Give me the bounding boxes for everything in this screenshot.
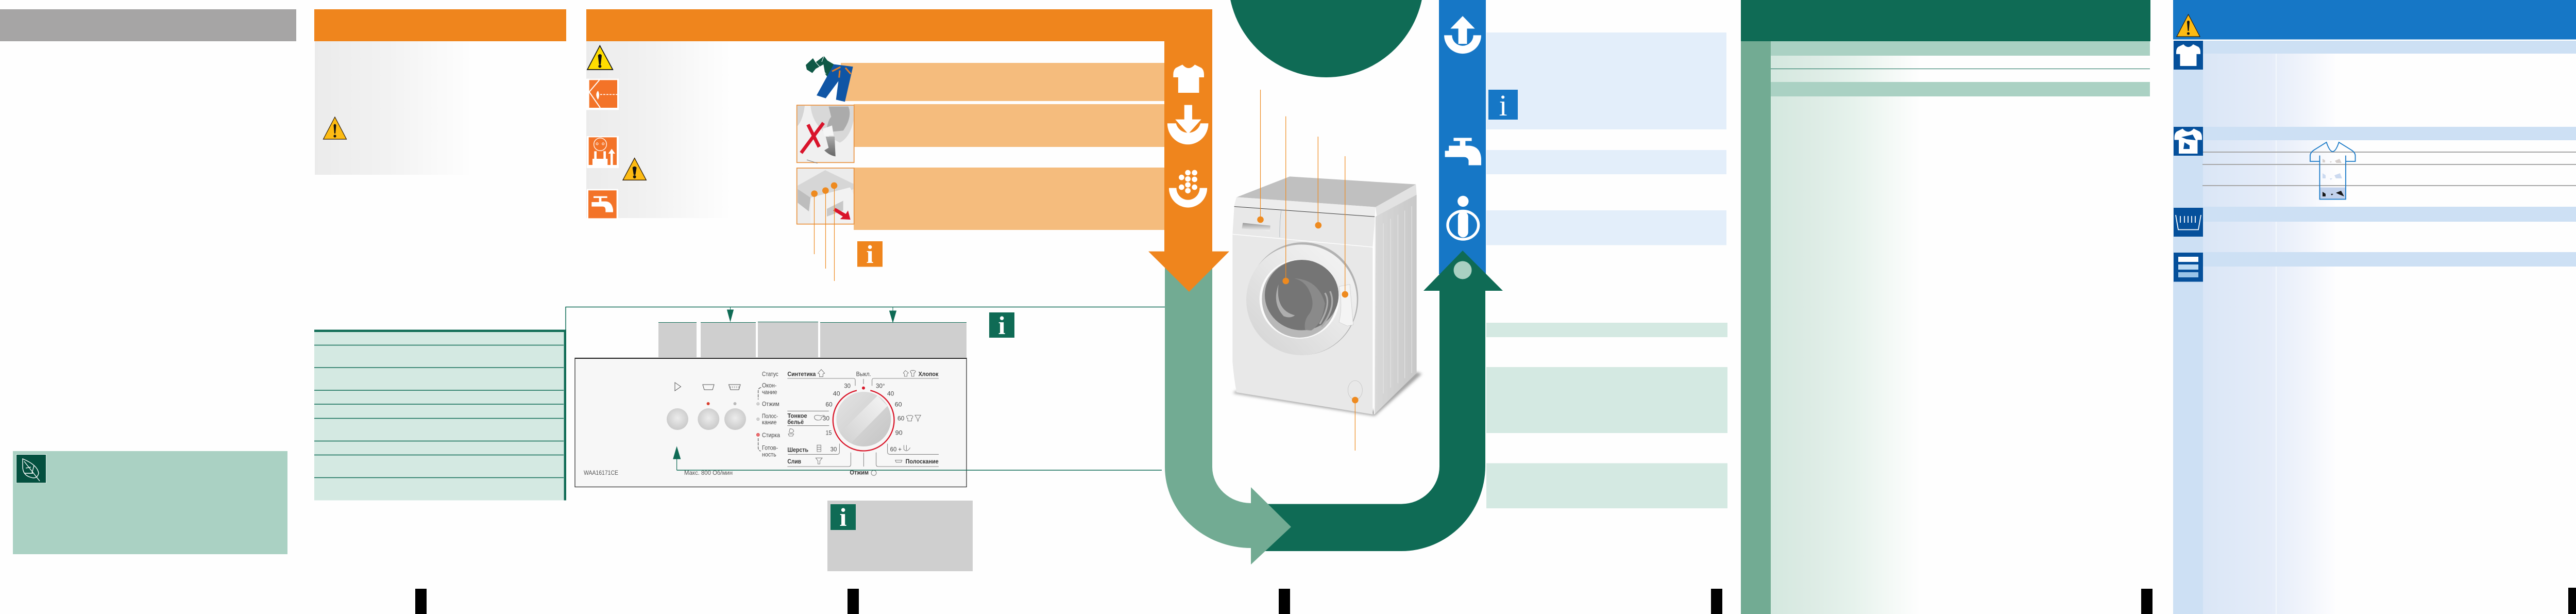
illustration: drum and sock: [797, 105, 854, 163]
programme dial and labels: [756, 370, 939, 476]
icon: work clothes: [806, 56, 853, 102]
icons: white on arrows: [1167, 16, 1481, 239]
bar: detergent: [854, 168, 1164, 230]
icon: stacked bars: [2174, 253, 2203, 281]
dial labels: Хлопок: [919, 370, 938, 377]
arrow: to programme buttons: [673, 447, 680, 470]
marker: green step dot: [1454, 261, 1471, 279]
arrow: to programme label: [889, 307, 896, 322]
icon: warning small: [623, 158, 646, 180]
panel: grey programme labels: [658, 322, 967, 357]
panel: programmes table: [1741, 0, 2150, 614]
dial labels: Выкл.: [856, 370, 871, 377]
panel: technical data table: [314, 330, 566, 500]
dial labels: 30: [831, 446, 837, 453]
button: option two: [724, 385, 746, 430]
panel: grey gradient installation text: [586, 41, 733, 219]
panel: washing machine control panel: [575, 358, 967, 487]
dial labels: 40: [833, 390, 840, 397]
dial labels: Полоскание: [906, 458, 939, 465]
icon: info green: i: [998, 311, 1006, 340]
arrow: to temperature label: [727, 307, 734, 321]
outline: programme frame bottom line: [677, 470, 1162, 471]
dial labels: Шерсть: [787, 446, 808, 453]
icon: leaf: [16, 455, 46, 483]
icons: safety and installation: [586, 46, 646, 219]
panel: eco tips: [13, 451, 287, 554]
panel: grey page header: [0, 9, 296, 41]
outline: programme frame top line: [566, 307, 1165, 330]
dial labels: бельё: [787, 419, 804, 426]
icon: plug and socket: [587, 136, 619, 168]
semicircle: dark green top: [1228, 0, 1424, 77]
icon: detergent: [1169, 170, 1207, 208]
status column: Окон-: [762, 382, 776, 389]
status column: Готов-: [762, 444, 778, 452]
panel: grey note with info icon: i: [840, 503, 847, 532]
status column: Полос-: [762, 412, 778, 420]
icon: info blue: i: [1499, 89, 1507, 122]
washing machine illustration: [1232, 176, 1422, 416]
panel: care and laundry sorting: [2173, 0, 2576, 614]
icon: shirt: [1173, 64, 1204, 93]
illustration: shirt with stains: [2310, 142, 2355, 199]
icon: information person: [1448, 196, 1479, 239]
bar: sorting laundry: [841, 63, 1164, 101]
button: option one: [698, 385, 719, 430]
panel: grey gradient safety text: [315, 41, 474, 175]
arrow: teal curve right: [1165, 268, 1291, 565]
dial labels: 60 +: [890, 446, 902, 453]
dial labels: 30: [823, 415, 829, 422]
icon: warning triangle: [324, 117, 346, 139]
dial labels: Слив: [787, 458, 801, 465]
panel: blue unloading notes: [1486, 32, 1726, 245]
status column: [756, 370, 780, 458]
status column: Статус: [762, 370, 778, 377]
button: start: [667, 383, 688, 430]
icon: wash basket: [2174, 208, 2203, 237]
dial labels: 30: [844, 382, 851, 389]
icon: water tap: [587, 189, 618, 219]
panel: grey note with info icon: [827, 501, 973, 571]
dial labels: [787, 370, 939, 476]
dial knob: [833, 387, 894, 451]
icon: warning yellow: [587, 46, 613, 70]
callouts: machine parts: [1257, 90, 1359, 451]
spin speed label: Макс. 800 Об/мин: [684, 470, 733, 476]
dial labels: 60: [895, 401, 902, 408]
bar: loading: [854, 104, 1164, 147]
icon: info orange: i: [867, 240, 874, 269]
status column: ность: [762, 451, 776, 458]
dial label lines: [787, 378, 939, 467]
dial labels: 60: [897, 415, 905, 422]
arrow: dark green up: [1251, 251, 1503, 551]
status column: Стирка: [762, 432, 780, 439]
illustrations: laundry steps: [797, 56, 854, 224]
icon: unload arrow: [1444, 16, 1481, 54]
icon: eye: [586, 79, 619, 110]
small programme icons: [788, 370, 921, 475]
icon: info orange: [857, 240, 883, 269]
illustration: detergent drawer: [797, 168, 854, 224]
status column: кание: [762, 419, 777, 426]
icon: stained shirt: [2174, 127, 2203, 156]
dial labels: 30°: [876, 382, 885, 389]
arrow: orange down: [1148, 9, 1229, 292]
icon: info green: [989, 311, 1014, 340]
page marks: black bars: [415, 588, 2576, 614]
dial labels: Синтетика: [787, 370, 816, 377]
dial labels: Тонкое: [787, 412, 807, 420]
panel: orange header, main column: [586, 9, 1212, 41]
dial labels: Отжим: [850, 469, 869, 476]
panel: orange header, safety column: [314, 9, 566, 41]
band: blue vertical column: [1439, 0, 1486, 274]
status column: Отжим: [762, 401, 779, 408]
icon: water tap: [1445, 138, 1481, 165]
leader lines: detergent compartments: [814, 186, 835, 281]
status column: чание: [762, 388, 777, 395]
dial labels: 40: [887, 390, 894, 397]
dial labels: 60: [825, 401, 833, 408]
panel: green notes: [1486, 323, 1727, 508]
dial labels: 15: [826, 429, 832, 436]
icon: info blue: [1488, 89, 1518, 122]
dial labels: 90: [895, 429, 903, 436]
model label: WAA16171CE: [584, 470, 618, 476]
icon: warning on header: [2177, 14, 2200, 37]
icon: shirt on dark blue: [2174, 41, 2203, 70]
icon: load arrow: [1167, 105, 1208, 144]
